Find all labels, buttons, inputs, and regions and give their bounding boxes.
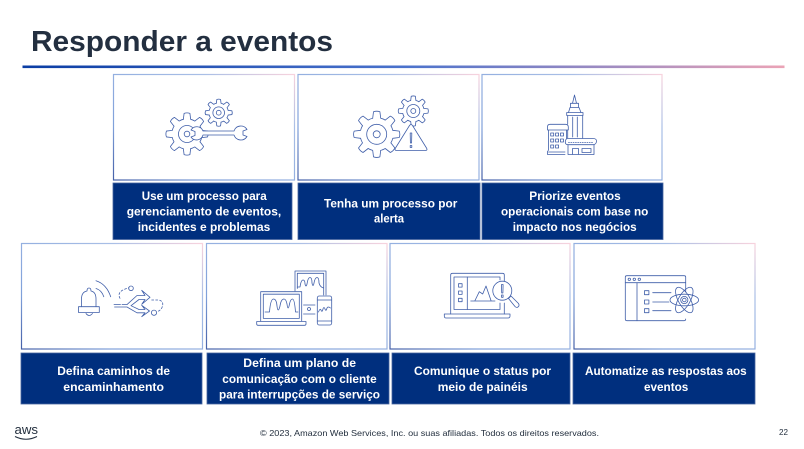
caption bar <box>21 353 202 404</box>
title: Responder a eventos <box>31 26 333 58</box>
caption text: Tenha um processo por <box>324 196 458 210</box>
card: routing paths <box>21 244 202 404</box>
caption text: Priorize eventos <box>529 189 621 203</box>
card: event management process <box>113 74 294 240</box>
caption text: Automatize as respostas aos <box>585 364 747 378</box>
card: automated responses <box>573 244 755 404</box>
panel frame <box>206 244 387 349</box>
panel frame <box>482 74 662 180</box>
caption text <box>324 196 458 226</box>
caption text <box>414 364 551 394</box>
copyright footer: © 2023, Amazon Web Services, Inc. ou suas afiliadas. Todos os direitos reservados. <box>260 428 599 438</box>
card: status dashboards <box>390 244 570 404</box>
caption text: operacionais com base no <box>501 204 648 218</box>
caption text: gerenciamento de eventos, <box>127 204 281 218</box>
title underline <box>22 66 784 68</box>
icon: laptop, monitor and phone <box>257 271 332 325</box>
caption text: Defina caminhos de <box>57 364 170 378</box>
caption text: eventos <box>644 380 689 394</box>
caption text <box>127 189 281 234</box>
caption text: comunicação com o cliente <box>222 372 377 386</box>
page number: 22 <box>779 427 788 437</box>
icon: gears and warning triangle <box>354 96 428 157</box>
caption bar <box>392 353 570 404</box>
icon: buildings <box>548 95 597 154</box>
caption bar <box>298 183 480 240</box>
caption bar <box>207 353 389 404</box>
caption text <box>57 364 170 394</box>
caption text: Defina um plano de <box>243 356 356 370</box>
icon: window with atom <box>625 276 699 321</box>
icon: dashboard laptop with magnifier <box>444 273 519 318</box>
panel frame <box>298 74 479 180</box>
card: customer communication plan <box>206 244 389 404</box>
caption text <box>501 189 648 234</box>
card: prioritize by business impact <box>482 74 663 240</box>
caption text: Use um processo para <box>142 189 267 203</box>
caption text: encaminhamento <box>63 380 164 394</box>
panel frame <box>22 244 202 349</box>
caption text: incidentes e problemas <box>138 220 271 234</box>
card: one process per alert <box>298 74 480 240</box>
icon: gears and wrench <box>166 99 247 155</box>
icon: bell and routing arrows <box>78 281 163 317</box>
panel frame <box>114 74 294 180</box>
caption bar <box>113 183 292 240</box>
caption text: para interrupções de serviço <box>219 388 380 402</box>
aws logo: aws <box>14 423 38 437</box>
caption bar <box>482 183 663 240</box>
caption text: impacto nos negócios <box>513 220 637 234</box>
caption text <box>585 364 747 394</box>
caption text: Comunique o status por <box>414 364 551 378</box>
panel frame <box>574 244 755 349</box>
caption text <box>219 356 380 402</box>
caption text: alerta <box>374 212 404 226</box>
panel frame <box>390 244 570 349</box>
caption text: meio de painéis <box>438 380 528 394</box>
caption bar <box>573 353 755 404</box>
